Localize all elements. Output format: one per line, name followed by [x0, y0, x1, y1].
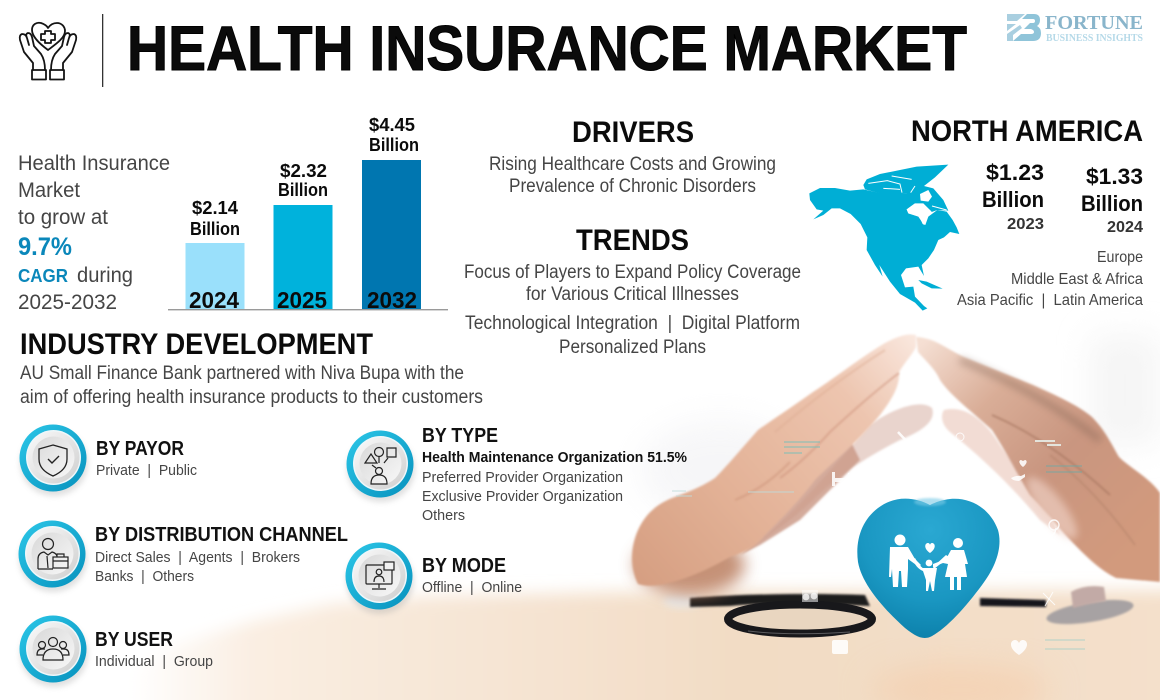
text block: market growth summary: 9.7%	[18, 233, 72, 261]
text block: market growth summary: CAGR	[18, 265, 68, 286]
photo: stethoscope tube	[663, 586, 1135, 634]
value 2023: $1.23	[986, 160, 1044, 185]
map: North America	[809, 165, 959, 311]
north america heading and values	[911, 115, 1143, 236]
icon: hands holding heart	[20, 23, 76, 79]
segment: by user: BY USER	[95, 629, 173, 651]
segment: by type: Preferred Provider Organization	[422, 469, 623, 486]
segment: by payor: Private | Public	[96, 462, 197, 479]
icon: shield	[20, 424, 88, 496]
bar 2032: $4.45	[369, 114, 415, 135]
photo: white medical overlay icons	[672, 432, 1085, 655]
bar 2024: 2024	[189, 287, 239, 313]
icon: online monitor	[346, 542, 414, 614]
trends: Personalized Plans	[559, 337, 706, 358]
industry development: AU Small Finance Bank partnered with Niva Bupa with the	[20, 363, 464, 384]
segment: by type: Health Maintenance Organization 51.5%	[422, 450, 687, 466]
text block: market growth summary: to grow at	[18, 206, 108, 229]
segment: by payor	[20, 424, 197, 496]
segment: by user	[20, 616, 213, 687]
trends: Technological Integration | Digital Platform	[465, 313, 800, 334]
title: HEALTH INSURANCE MARKET	[127, 14, 967, 84]
icon: person with plan options	[346, 430, 415, 502]
value 2023: Billion	[982, 187, 1044, 212]
trends: for Various Critical Illnesses	[526, 284, 739, 305]
text block: market growth summary	[18, 152, 170, 314]
bar 2024: Billion	[190, 218, 240, 239]
logo: Fortune Business Insights: BUSINESS INSIGHTS	[1046, 33, 1143, 44]
photo: right hand	[916, 337, 1160, 582]
drivers: Prevalence of Chronic Disorders	[509, 176, 756, 197]
north america heading and values: NORTH AMERICA	[911, 115, 1143, 148]
segment: by distribution channel: BY DISTRIBUTION CHANNEL	[95, 524, 348, 546]
other regions list: Asia Pacific | Latin America	[957, 292, 1143, 309]
bar 2032	[362, 114, 421, 313]
segment: by distribution channel: Banks | Others	[95, 568, 194, 585]
value 2024	[1081, 164, 1143, 236]
header divider	[102, 14, 103, 87]
segment: by mode	[346, 542, 522, 614]
icon: group of people	[20, 616, 88, 687]
segment: by type: Others	[422, 507, 465, 524]
bar chart: market size	[168, 114, 448, 313]
text block: market growth summary: during	[77, 264, 133, 287]
bar 2024	[186, 197, 244, 313]
segment: by distribution channel: Direct Sales | Agents | Brokers	[95, 549, 300, 566]
segment: by type: BY TYPE	[422, 425, 498, 447]
value 2024: 2024	[1107, 219, 1143, 236]
industry development	[20, 328, 483, 408]
text block: market growth summary: Market	[18, 179, 80, 202]
value 2024: Billion	[1081, 191, 1143, 216]
bar 2025: $2.32	[280, 160, 327, 181]
segment: by payor: BY PAYOR	[96, 438, 184, 460]
drivers: Rising Healthcare Costs and Growing	[489, 154, 776, 175]
bar 2024: $2.14	[192, 197, 239, 218]
trends: Focus of Players to Expand Policy Coverage	[464, 262, 801, 283]
segment: by type	[346, 425, 687, 524]
logo: Fortune Business Insights: FORTUNE	[1045, 12, 1143, 34]
bar 2032: 2032	[367, 287, 417, 313]
industry development: INDUSTRY DEVELOPMENT	[20, 328, 373, 361]
industry development: aim of offering health insurance products to their customers	[20, 387, 483, 408]
segment: by type: Exclusive Provider Organization	[422, 488, 623, 505]
bar 2025: 2025	[277, 287, 327, 313]
value 2023	[982, 160, 1044, 233]
icon: agent with briefcase	[18, 520, 87, 592]
segment: by mode: BY MODE	[422, 555, 506, 577]
other regions list: Europe	[1097, 249, 1143, 266]
photo background: table surface	[125, 335, 1160, 700]
photo: left hand	[632, 335, 916, 595]
segment: by user: Individual | Group	[95, 653, 213, 670]
text block: market growth summary: Health Insurance	[18, 152, 170, 175]
bar 2025	[274, 160, 332, 313]
value 2024: $1.33	[1086, 164, 1143, 189]
drivers	[489, 116, 776, 197]
logo: Fortune Business Insights	[1007, 12, 1143, 44]
value 2023: 2023	[1007, 216, 1044, 233]
drivers: DRIVERS	[572, 116, 694, 149]
bar 2025: Billion	[278, 179, 328, 200]
other regions list	[957, 249, 1143, 309]
icon: family on heart	[889, 534, 968, 591]
bar 2032: Billion	[369, 134, 419, 155]
other regions list: Middle East & Africa	[1011, 271, 1143, 288]
photo: blue heart with family	[857, 498, 1000, 638]
segment: by distribution channel	[18, 520, 348, 592]
trends	[464, 224, 801, 358]
segment: by mode: Offline | Online	[422, 579, 522, 596]
trends: TRENDS	[576, 224, 689, 257]
text block: market growth summary: 2025-2032	[18, 291, 117, 314]
photo: back fingers of hands, faint	[740, 404, 1060, 555]
